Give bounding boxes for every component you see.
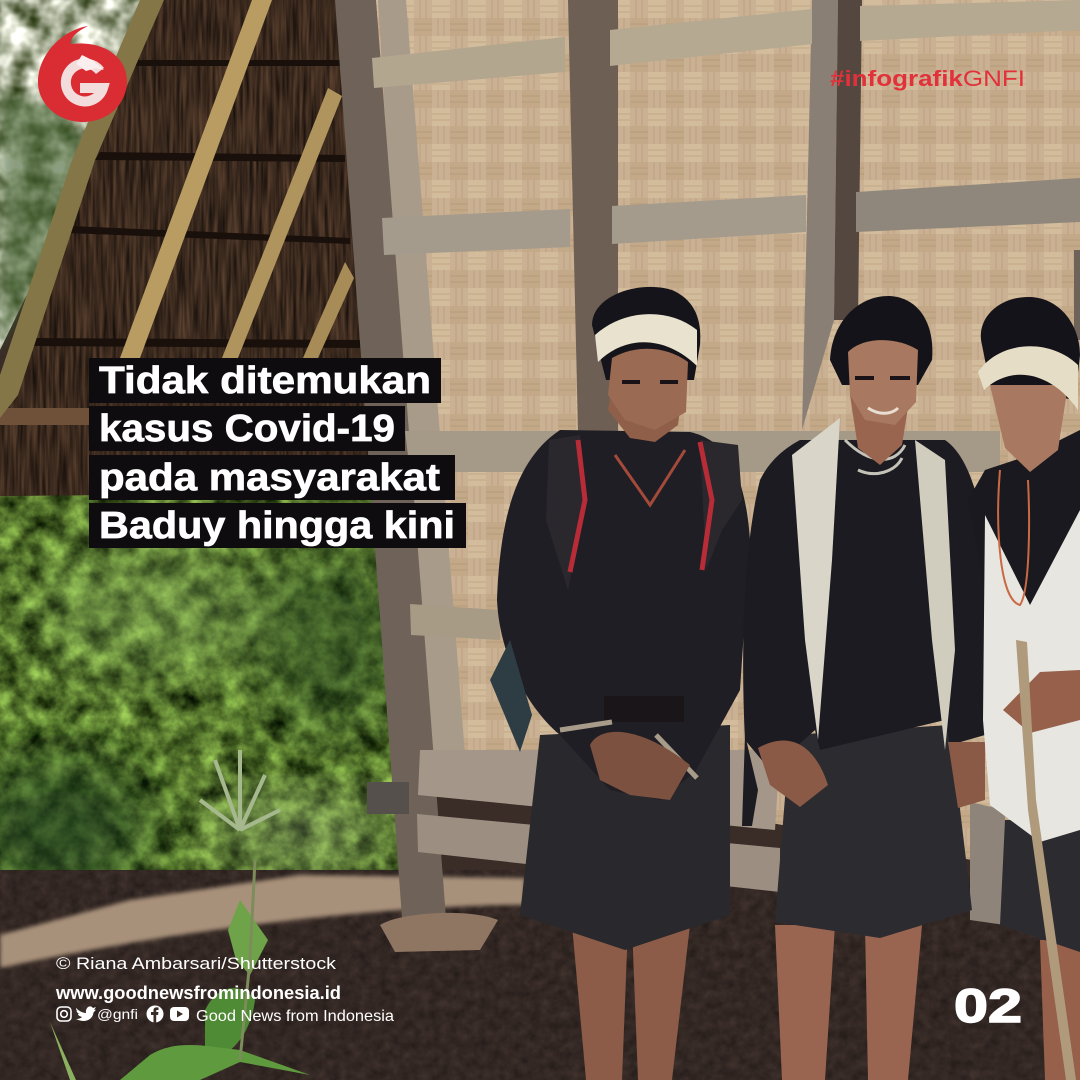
hashtag label: #infografik GNFI xyxy=(830,66,1025,91)
bamboo eave beam xyxy=(0,0,164,418)
headline xyxy=(89,358,466,548)
headline line 1: Tidak ditemukan xyxy=(99,360,431,402)
icon: twitter xyxy=(76,1006,96,1021)
icon: youtube xyxy=(170,1007,189,1021)
page number: 02 xyxy=(954,979,1022,1032)
sky and tree canopy, top left xyxy=(0,0,140,350)
headline line 4: Baduy hingga kini xyxy=(99,505,455,547)
wall rails xyxy=(372,0,1080,640)
headline line 2: kasus Covid-19 xyxy=(99,408,395,450)
foreground plant xyxy=(50,750,310,1080)
channel name: Good News from Indonesia xyxy=(196,1008,394,1025)
icon: facebook xyxy=(146,1006,164,1023)
handle text: @gnfi xyxy=(97,1006,138,1022)
social handles xyxy=(57,1006,394,1025)
photo credit: © Riana Ambarsari/Shutterstock xyxy=(56,954,337,973)
wall posts xyxy=(335,0,862,918)
icon: instagram xyxy=(57,1007,71,1021)
ground xyxy=(0,870,1080,1080)
person 3 xyxy=(968,297,1080,1080)
bamboo wall xyxy=(375,0,1080,880)
logo: white G emblem xyxy=(66,55,104,101)
logo: GNFI red badge xyxy=(38,26,127,122)
bamboo rafters xyxy=(120,0,272,358)
roof underside xyxy=(0,0,400,500)
headline line 3: pada masyarakat xyxy=(99,457,440,499)
foliage, left side xyxy=(0,495,398,870)
person 1 xyxy=(490,287,750,1080)
lower wall boards xyxy=(367,750,1005,952)
person 2 xyxy=(742,296,990,1080)
website address: www.goodnewsfromindonesia.id xyxy=(55,983,341,1003)
